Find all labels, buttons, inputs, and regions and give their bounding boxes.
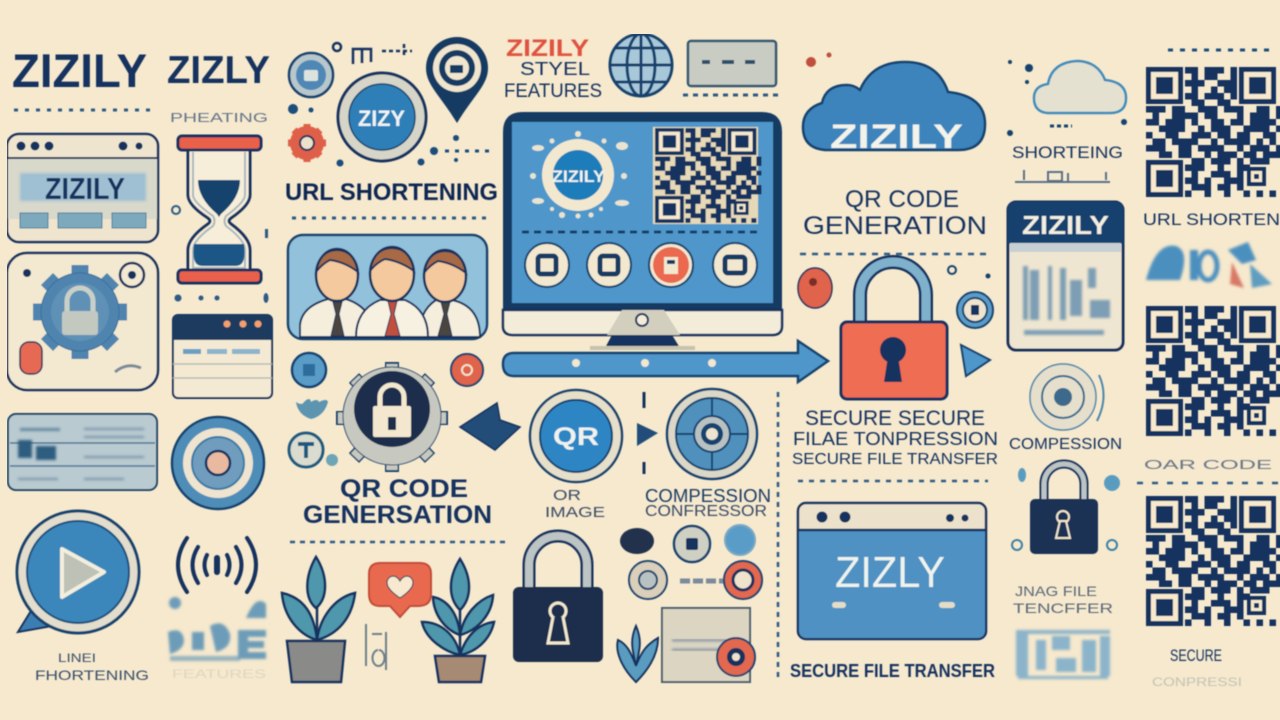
heading: URL shortening: URL SHORTENING — [285, 179, 498, 206]
icon: Zizy button: ZIZY — [358, 106, 405, 131]
icon: red gear — [288, 124, 326, 162]
icons: padlock side badges — [798, 266, 993, 376]
dashed vertical divider — [777, 392, 779, 680]
heading: secure file transfer: SECURE SECURE — [805, 407, 985, 430]
icon: pale target — [1030, 364, 1104, 430]
dotted accents above QR — [1168, 48, 1270, 52]
heading: style features: FEATURES — [504, 81, 602, 102]
person right — [420, 250, 480, 337]
icon: red padlock — [841, 262, 947, 399]
dots near top cloud — [806, 52, 832, 67]
dotted divider above lower QR — [1137, 482, 1278, 484]
caption: compression faint: CONPRESSI — [1152, 675, 1242, 689]
person left — [300, 249, 376, 337]
icon: hourglass — [178, 136, 261, 283]
arrow: small right — [637, 392, 658, 474]
icon: dark padlock — [1012, 464, 1120, 554]
dotted divider — [14, 108, 152, 112]
panel: Zizily calendar: ZIZILY — [1022, 210, 1109, 240]
icon: play button — [17, 511, 139, 633]
panel: Zizily window: ZIZLY — [835, 548, 945, 597]
heading: QR code generation right — [803, 186, 987, 240]
heading: style features: STYEL — [520, 59, 590, 79]
caption: compession: COMPESSION — [1009, 436, 1122, 453]
panel: blank card top — [688, 41, 776, 86]
heading: Zizily: ZIZILY — [12, 44, 147, 97]
icon cluster: feature badges — [620, 525, 762, 599]
blurred features label — [168, 597, 266, 661]
heading: QR code generation: GENERSATION — [303, 501, 492, 529]
heading: secure file transfer: SECURE FILE TRANSFER — [792, 451, 998, 468]
heading: style features — [504, 35, 602, 102]
dashed divider — [800, 253, 990, 255]
caption: faint features: FEATURES — [172, 667, 266, 681]
panel: gear and lock — [7, 253, 158, 390]
captions: QR image and compression: COMPESSION — [645, 486, 771, 506]
blurred label lower — [1016, 630, 1110, 679]
panel: browser window: ZIZILY — [45, 171, 125, 206]
icon: globe — [610, 34, 672, 96]
dotted line on screen — [522, 230, 762, 234]
blurred coloured label — [1146, 242, 1272, 288]
heading: Zizily — [12, 44, 270, 97]
panel: compressed file window — [662, 608, 755, 682]
icon: compression dial — [667, 389, 757, 479]
icon: map pin — [426, 37, 488, 123]
heading: QR code generation: QR CODE — [340, 475, 468, 503]
QR code: top — [1146, 67, 1280, 197]
icon: large padlock bottom — [513, 536, 603, 662]
monitor — [503, 112, 782, 350]
panel: browser window — [7, 134, 158, 242]
icon: heart speech bubble — [369, 563, 431, 617]
captions: QR image and compression: OR — [553, 487, 581, 504]
caption: shorteing: SHORTEING — [1012, 143, 1123, 162]
heading: Zizily: ZIZLY — [167, 49, 270, 92]
captions: QR image and compression: IMAGE — [545, 504, 605, 521]
marks beside hourglass — [172, 206, 268, 303]
panel: Zizily window — [798, 503, 986, 639]
QR code on screen — [653, 127, 761, 224]
caption: jnag file transfer: TENCFFER — [1013, 600, 1113, 616]
icon: Zizily cloud: ZIZILY — [830, 118, 963, 156]
dashed divider — [798, 480, 988, 482]
icon: Zizy button — [338, 73, 426, 161]
icon: plant right — [422, 559, 494, 682]
heading: QR code generation right: QR CODE — [845, 186, 959, 213]
icon: target dial — [172, 417, 264, 509]
person centre — [356, 247, 428, 337]
heading: style features: ZIZILY — [506, 35, 589, 62]
caption: secure: SECURE — [1170, 646, 1222, 665]
logo: Zizily seal — [530, 131, 629, 218]
panel: Zizily calendar — [1008, 202, 1123, 350]
icons: small badges beside gear — [289, 353, 483, 467]
icon: plant left — [282, 557, 355, 682]
captions: QR image and compression — [545, 486, 771, 521]
icon: QR badge: QR — [553, 423, 599, 451]
QR code: bottom — [1146, 496, 1280, 626]
icon: Zizily cloud — [803, 62, 985, 156]
heading: secure file transfer — [792, 407, 998, 468]
icon: broadcast signal — [178, 538, 256, 592]
underline marks — [1015, 170, 1110, 182]
action buttons — [525, 243, 757, 287]
icon: small badge top — [289, 53, 333, 97]
dotted divider — [683, 94, 783, 96]
caption: URL shorten: URL SHORTEN — [1143, 210, 1280, 229]
heading: QR code generation — [303, 475, 492, 529]
panel: team of people — [288, 235, 487, 339]
caption: jnag file transfer: JNAG FILE — [1015, 583, 1097, 599]
dots beside badge — [288, 104, 492, 166]
icon: music and dots — [333, 43, 412, 64]
arrow: left pointing — [460, 403, 520, 450]
captions: QR image and compression: CONFRESSOR — [645, 503, 767, 520]
heading: QR code generation right: GENERATION — [803, 212, 987, 240]
dotted divider — [292, 216, 490, 220]
panel: blurred text card — [8, 414, 157, 490]
caption: QR code: OAR CODE — [1144, 457, 1273, 472]
heading: secure file transfer: FILAE TONPRESSION — [793, 429, 998, 449]
icon: outline cloud — [1007, 60, 1127, 136]
caption: line shortening: FHORTENING — [35, 667, 149, 683]
caption: secure file transfer: SECURE FILE TRANSFER — [790, 661, 995, 681]
arrow: long timeline — [503, 341, 828, 382]
QR code: middle — [1146, 306, 1280, 436]
caption: line shortening — [35, 651, 149, 683]
glyph marks: bottom mid — [366, 624, 386, 670]
icon: QR badge — [530, 390, 622, 482]
icon: gear with dark lock — [336, 362, 448, 472]
caption: line shortening: LINEI — [58, 651, 96, 665]
panel: small app window — [173, 315, 272, 398]
logo: Zizily seal: ZIZILY — [552, 167, 606, 186]
caption: pheating: PHEATING — [170, 110, 268, 125]
icon: leaf — [617, 626, 658, 682]
dashed divider — [290, 541, 510, 543]
caption: jnag file transfer — [1013, 583, 1113, 616]
